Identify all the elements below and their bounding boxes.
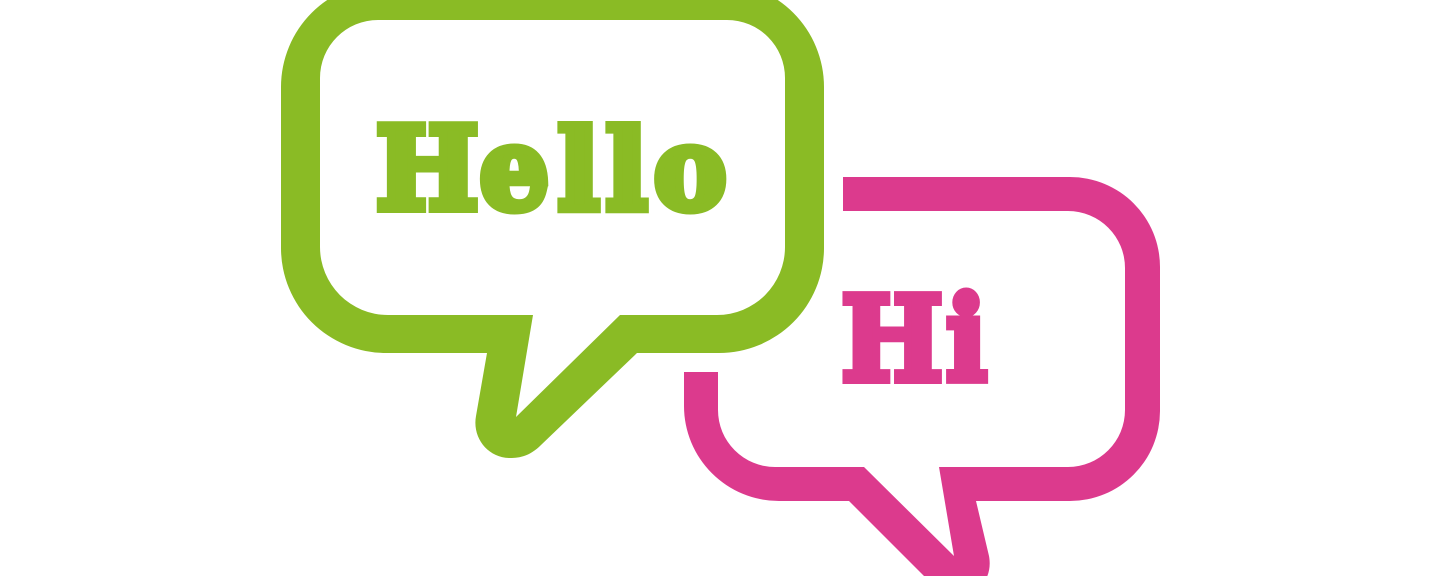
pink speech bubble [684,177,1160,576]
green bubble outline with tail [281,0,824,458]
pink word: Hi: Hi [841,272,987,408]
green word: Hello: Hello [376,103,726,236]
pink bubble outline with tail [684,177,1160,576]
speech bubbles illustration [281,0,1160,576]
